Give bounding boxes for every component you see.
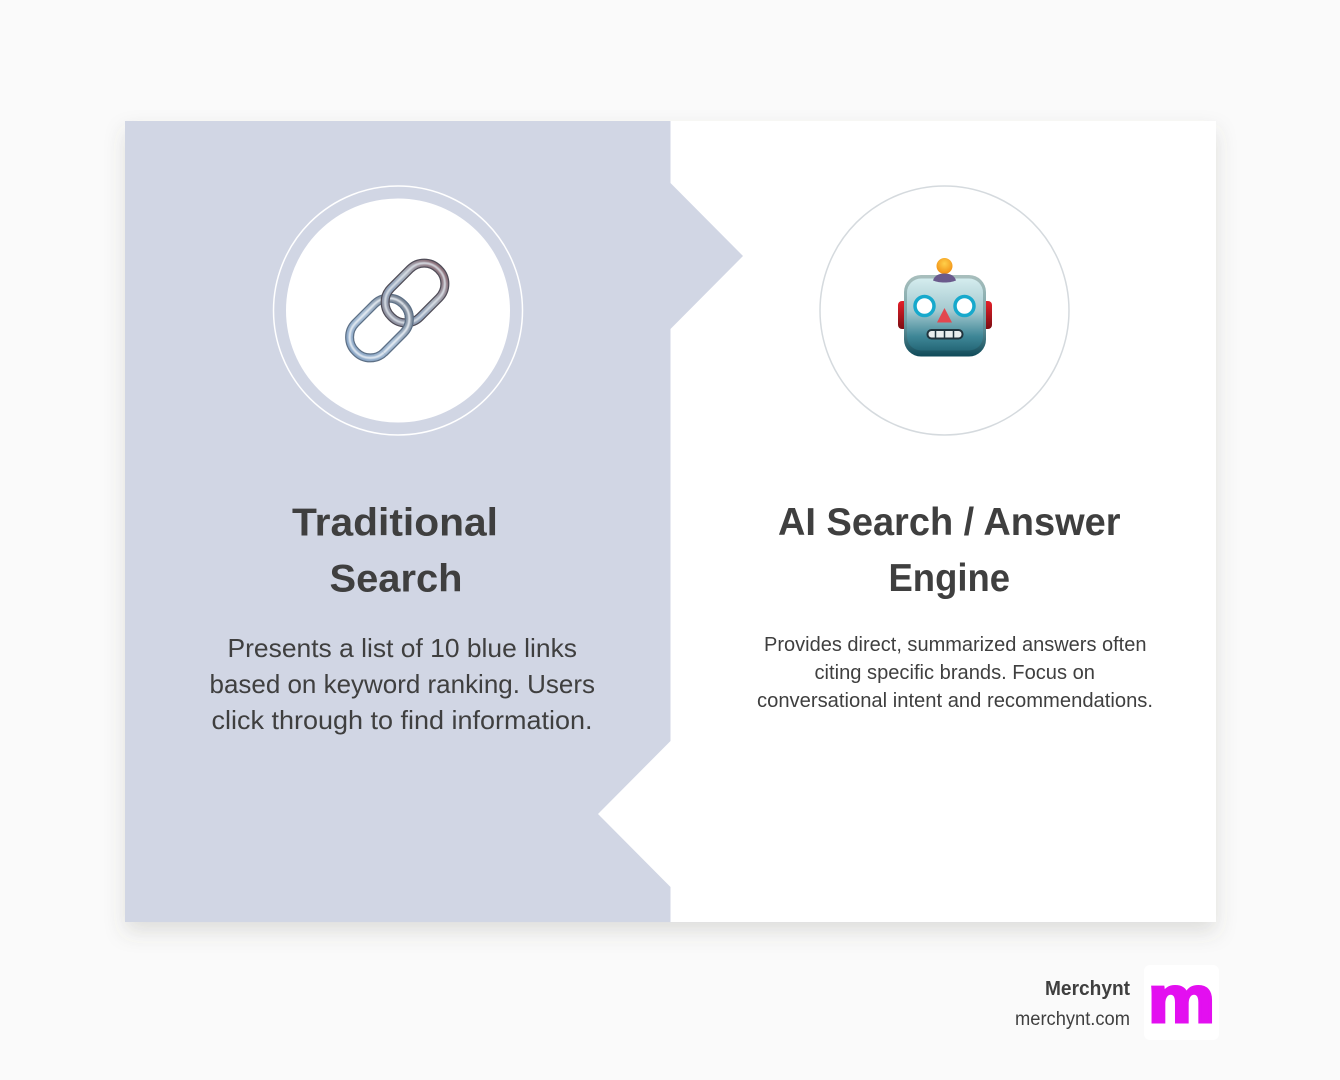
heading: traditional search: Search xyxy=(330,558,462,600)
heading: traditional search xyxy=(292,502,498,600)
heading: traditional search: Traditional xyxy=(292,502,498,544)
brand footer xyxy=(1015,962,1219,1040)
text: traditional search description xyxy=(210,633,595,735)
heading: ai search: AI Search / Answer xyxy=(778,501,1120,544)
text: traditional search description: Presents a list of 10 blue links xyxy=(228,633,577,663)
icon: robot face xyxy=(898,258,992,356)
text: ai search description: Provides direct, summarized answers often xyxy=(764,634,1146,656)
panel: traditional search xyxy=(125,121,743,922)
text: ai search description xyxy=(757,634,1153,712)
brand url: merchynt.com xyxy=(1015,1009,1130,1030)
brand name: Merchynt xyxy=(1045,978,1130,1000)
text: traditional search description: click through to find information. xyxy=(212,705,592,735)
text: traditional search description: based on keyword ranking. Users xyxy=(210,669,595,699)
logo: m xyxy=(1148,962,1215,1036)
icon: chain link xyxy=(345,258,450,362)
text: ai search description: conversational intent and recommendations. xyxy=(757,690,1153,712)
icon circle: ai search xyxy=(820,186,1069,435)
icon circle: traditional search xyxy=(274,186,522,435)
heading: ai search xyxy=(778,501,1120,600)
text: ai search description: citing specific brands. Focus on xyxy=(814,662,1095,684)
panel: ai search xyxy=(757,186,1153,712)
heading: ai search: Engine xyxy=(888,557,1010,600)
panel: comparison card xyxy=(125,121,1216,922)
